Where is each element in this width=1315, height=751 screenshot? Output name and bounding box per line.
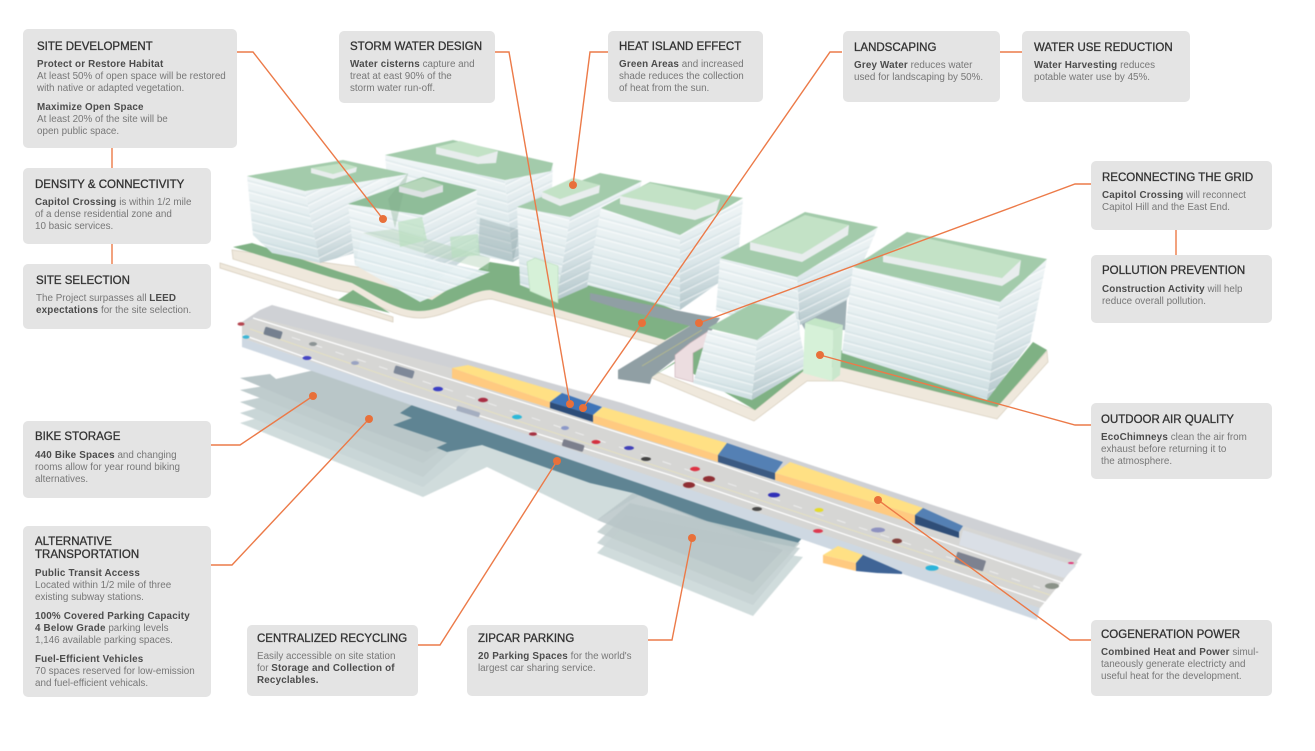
text: storm water run-off. xyxy=(350,83,435,94)
heading: OUTDOOR AIR QUALITY xyxy=(1101,414,1234,426)
panel: landscaping xyxy=(843,31,1000,102)
panel: bike storage xyxy=(23,421,211,498)
text: public transit xyxy=(35,568,171,603)
text: open space xyxy=(37,102,168,137)
panel: zipcar parking xyxy=(467,625,648,696)
highway xyxy=(242,305,1082,620)
text: rooms allow for year round biking xyxy=(35,462,180,473)
cars xyxy=(238,322,1074,589)
text: the atmosphere. xyxy=(1101,456,1172,467)
text xyxy=(36,293,191,316)
building: large right block xyxy=(842,232,1047,400)
heading: RECONNECTING THE GRID xyxy=(1102,172,1253,184)
text: The Project surpasses all LEED xyxy=(36,293,176,304)
text: largest car sharing service. xyxy=(478,663,596,674)
text: Water cisterns capture and xyxy=(350,59,475,70)
text: fuel-efficient vehicles: and fuel-efficient vehicals. xyxy=(35,678,148,689)
text: covered parking xyxy=(35,611,190,646)
text: Water Harvesting reduces xyxy=(1034,60,1155,71)
text: treat at east 90% of the xyxy=(350,71,452,82)
text: protect habitat: Protect or Restore Habitat xyxy=(37,59,163,70)
heading: ALTERNATIVE xyxy=(35,536,112,548)
building: centre with roof garden xyxy=(517,173,642,300)
text xyxy=(854,60,983,83)
text: useful heat for the development. xyxy=(1101,671,1242,682)
text: Recyclables. xyxy=(257,675,319,686)
text xyxy=(619,59,744,94)
panel: alternative transportation xyxy=(23,526,211,697)
panel: heat island effect xyxy=(608,31,763,102)
text: public transit: Located within 1/2 mile of three xyxy=(35,580,171,591)
panel: storm water design xyxy=(339,31,495,103)
text: protect habitat: At least 50% of open space will be restored xyxy=(37,71,226,82)
top parking level xyxy=(240,368,447,452)
building: tower behind road xyxy=(716,212,878,340)
text xyxy=(1102,284,1243,307)
text: potable water use by 45%. xyxy=(1034,72,1150,83)
heading: CENTRALIZED RECYCLING xyxy=(257,633,407,645)
building: low front with pink entrance xyxy=(675,303,807,400)
text: of a dense residential zone and xyxy=(35,209,172,220)
green roof and cistern blocks xyxy=(452,365,963,574)
text xyxy=(1034,60,1155,83)
text xyxy=(1102,190,1246,213)
panel: cogeneration power xyxy=(1091,620,1272,696)
text xyxy=(478,651,632,674)
panel: outdoor air quality xyxy=(1091,403,1272,479)
underground service level xyxy=(393,403,803,552)
text: public transit: Public Transit Access xyxy=(35,568,140,579)
text: Capitol Hill and the East End. xyxy=(1102,202,1230,213)
panel: site development xyxy=(23,29,237,148)
text: EcoChimneys clean the air from xyxy=(1101,432,1247,443)
building: left xyxy=(247,160,408,263)
text: fuel-efficient vehicles xyxy=(35,654,195,689)
text xyxy=(35,197,191,232)
ground platforms xyxy=(220,243,1048,421)
panel: water use reduction xyxy=(1022,31,1190,102)
zipcar parking levels xyxy=(597,493,803,616)
text: 20 Parking Spaces for the world's xyxy=(478,651,632,662)
parking levels xyxy=(240,368,640,520)
building: centre right xyxy=(587,182,743,310)
text: for Storage and Collection of xyxy=(257,663,395,674)
text: expectations for the site selection. xyxy=(36,305,191,316)
building: stepped front left xyxy=(348,173,490,302)
text: covered parking: 4 Below Grade parking levels xyxy=(35,623,169,634)
text xyxy=(350,59,475,94)
heading: WATER USE REDUCTION xyxy=(1034,42,1173,54)
heading: ZIPCAR PARKING xyxy=(478,633,574,645)
text: covered parking: 1,146 available parking spaces. xyxy=(35,635,173,646)
panel: site selection xyxy=(23,264,211,329)
panel: pollution prevention xyxy=(1091,255,1272,323)
building: rear centre xyxy=(385,140,553,262)
panel: density and connectivity xyxy=(23,168,211,244)
heading: LANDSCAPING xyxy=(854,42,936,54)
text: open space: At least 20% of the site will be xyxy=(37,114,168,125)
text xyxy=(1101,432,1247,467)
text: alternatives. xyxy=(35,474,88,485)
heading: POLLUTION PREVENTION xyxy=(1102,265,1245,277)
text: exhaust before returning it to xyxy=(1101,444,1226,455)
text: shade reduces the collection xyxy=(619,71,744,82)
heading: COGENERATION POWER xyxy=(1101,629,1240,641)
heading: BIKE STORAGE xyxy=(35,431,120,443)
text: open space: open public space. xyxy=(37,126,119,137)
text: open space: Maximize Open Space xyxy=(37,102,144,113)
heading xyxy=(34,536,139,561)
text: of heat from the sun. xyxy=(619,83,709,94)
text: Combined Heat and Power simul- xyxy=(1101,647,1259,658)
heading: SITE DEVELOPMENT xyxy=(37,41,153,53)
text: 10 basic services. xyxy=(35,221,113,232)
text: taneously generate electricty and xyxy=(1101,659,1245,670)
heading: DENSITY & CONNECTIVITY xyxy=(35,179,184,191)
text: public transit: existing subway stations. xyxy=(35,592,144,603)
text: Easily accessible on site station xyxy=(257,651,395,662)
text: Grey Water reduces water xyxy=(854,60,972,71)
panel: reconnecting the grid xyxy=(1091,161,1272,230)
text: 440 Bike Spaces and changing xyxy=(35,450,177,461)
text: protect habitat: with native or adapted vegetation. xyxy=(37,83,184,94)
text xyxy=(1101,647,1259,682)
text: covered parking: 100% Covered Parking Capacity xyxy=(35,611,190,622)
text: protect habitat xyxy=(37,59,226,94)
heading: SITE SELECTION xyxy=(36,275,130,287)
EcoChimneys xyxy=(527,258,843,381)
heading: STORM WATER DESIGN xyxy=(350,41,482,53)
text xyxy=(35,450,180,485)
heading: TRANSPORTATION xyxy=(35,549,139,561)
panel: centralized recycling xyxy=(247,625,418,696)
text: Green Areas and increased xyxy=(619,59,744,70)
text: Capitol Crossing is within 1/2 mile xyxy=(35,197,191,208)
text: Construction Activity will help xyxy=(1102,284,1243,295)
text: reduce overall pollution. xyxy=(1102,296,1206,307)
text: used for landscaping by 50%. xyxy=(854,72,983,83)
text: fuel-efficient vehicles: Fuel-Efficient Vehicles xyxy=(35,654,143,665)
text: Capitol Crossing will reconnect xyxy=(1102,190,1246,201)
text: fuel-efficient vehicles: 70 spaces reserved for low-emission xyxy=(35,666,195,677)
heading: HEAT ISLAND EFFECT xyxy=(619,41,741,53)
text xyxy=(257,651,395,686)
